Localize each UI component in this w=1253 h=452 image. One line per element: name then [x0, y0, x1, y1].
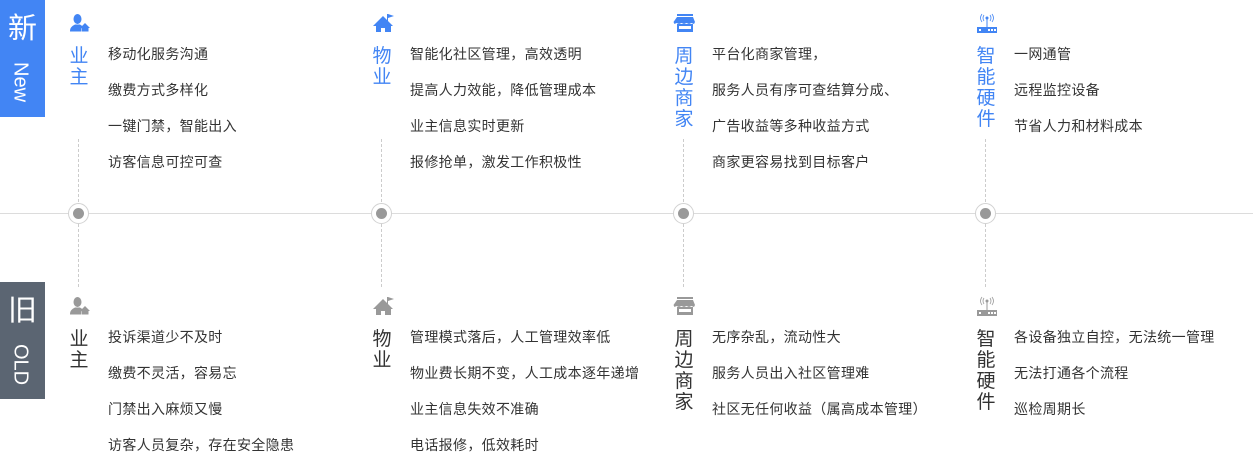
- text: 无法打通各个流程: [1014, 365, 1129, 381]
- text: 无序杂乱，流动性大: [712, 329, 841, 345]
- heading: owner new: 业: [69, 46, 88, 67]
- heading: merchants new: 家: [674, 109, 694, 130]
- heading: merchants new: [674, 46, 694, 130]
- heading: property old: [372, 329, 392, 371]
- heading: hardware new: 智: [976, 46, 996, 67]
- text: 平台化商家管理，: [712, 46, 827, 62]
- heading: hardware old: 件: [976, 392, 996, 413]
- text: owner old: [108, 329, 294, 452]
- text: 各设备独立自控，无法统一管理: [1014, 329, 1215, 345]
- text: property new: [410, 46, 596, 170]
- heading: merchants new: 周: [674, 46, 694, 67]
- heading: merchants old: 家: [674, 392, 694, 413]
- text: 提高人力效能，降低管理成本: [410, 82, 596, 98]
- tag: new: New: [10, 62, 32, 103]
- heading: merchants old: 商: [674, 371, 694, 392]
- text: property old: [410, 329, 639, 452]
- heading: merchants old: 边: [674, 350, 694, 371]
- text: 商家更容易找到目标客户: [712, 154, 870, 170]
- heading: hardware old: 智: [976, 329, 996, 350]
- heading: property old: 物: [372, 329, 392, 350]
- text: 巡检周期长: [1014, 401, 1086, 417]
- text: 门禁出入麻烦又慢: [108, 401, 223, 417]
- text: owner new: [108, 46, 237, 170]
- text: 业主信息失效不准确: [410, 401, 539, 417]
- heading: merchants old: [674, 329, 694, 413]
- text: 一网通管: [1014, 46, 1071, 62]
- text: hardware new: [1014, 46, 1143, 134]
- text: 投诉渠道少不及时: [108, 329, 223, 345]
- text: 报修抢单，激发工作积极性: [410, 154, 582, 170]
- heading: hardware new: 能: [976, 67, 996, 88]
- heading: property new: 物: [372, 46, 392, 67]
- heading: hardware new: 件: [976, 109, 996, 130]
- tag: new: [0, 0, 45, 117]
- heading: hardware old: 硬: [976, 371, 996, 392]
- text: 缴费不灵活，容易忘: [108, 365, 237, 381]
- heading: merchants new: 边: [674, 67, 694, 88]
- tag: old: [0, 282, 45, 399]
- heading: owner new: 主: [69, 67, 88, 88]
- heading: owner old: [69, 329, 88, 371]
- heading: hardware old: [976, 328, 996, 413]
- heading: hardware new: [976, 46, 996, 130]
- text: merchants new: [712, 46, 898, 170]
- heading: owner old: 业: [69, 329, 88, 350]
- text: 管理模式落后，人工管理效率低: [410, 329, 611, 345]
- heading: owner new: [69, 46, 88, 88]
- heading: hardware new: 硬: [976, 88, 996, 109]
- heading: hardware old: 能: [976, 350, 996, 371]
- tag: new: 新: [8, 13, 37, 45]
- heading: property old: 业: [372, 350, 392, 371]
- text: 访客信息可控可查: [108, 154, 223, 170]
- text: hardware old: [1014, 329, 1215, 417]
- text: 服务人员出入社区管理难: [712, 365, 870, 381]
- heading: merchants old: 周: [674, 329, 694, 350]
- tag: old: 旧: [8, 295, 37, 327]
- tag: old: OLD: [10, 344, 32, 385]
- heading: property new: 业: [372, 67, 392, 88]
- text: 业主信息实时更新: [410, 118, 525, 134]
- text: 移动化服务沟通: [108, 46, 208, 62]
- text: 物业费长期不变，人工成本逐年递增: [410, 365, 639, 381]
- text: 远程监控设备: [1014, 82, 1100, 98]
- text: 社区无任何收益（属高成本管理）: [712, 401, 927, 417]
- heading: property new: [372, 46, 392, 88]
- text: 一键门禁，智能出入: [108, 118, 237, 134]
- text: merchants old: [712, 329, 927, 417]
- text: 广告收益等多种收益方式: [712, 118, 870, 134]
- text: 智能化社区管理，高效透明: [410, 46, 582, 62]
- text: 缴费方式多样化: [108, 82, 208, 98]
- text: 服务人员有序可查结算分成、: [712, 82, 898, 98]
- text: 节省人力和材料成本: [1014, 118, 1143, 134]
- heading: owner old: 主: [69, 350, 88, 371]
- heading: merchants new: 商: [674, 88, 694, 109]
